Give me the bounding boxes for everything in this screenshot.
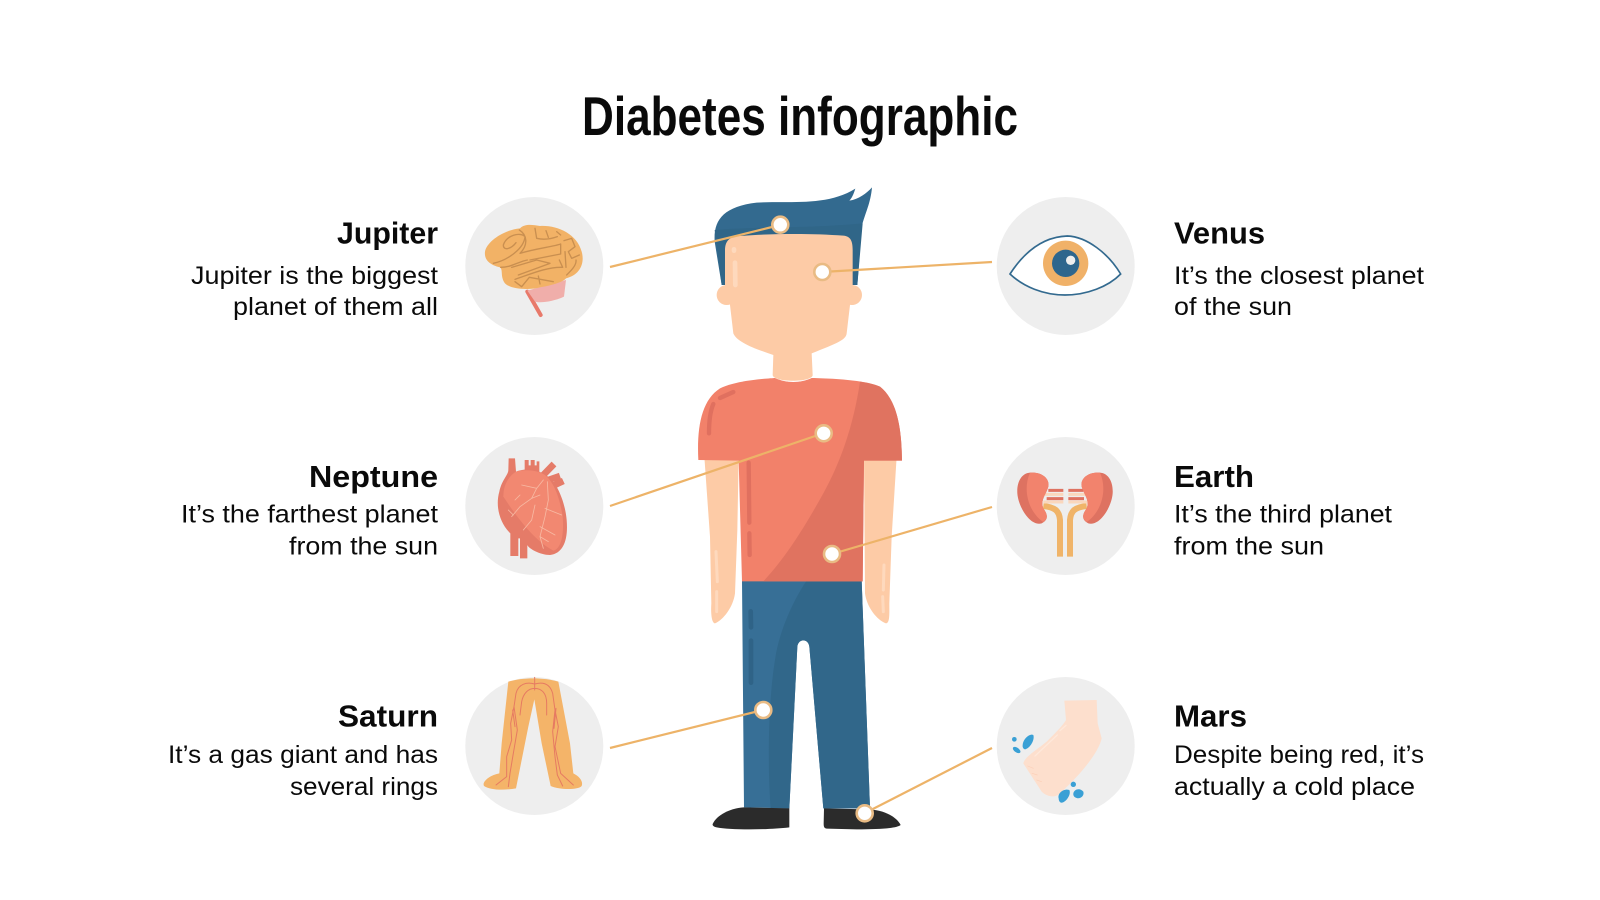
figure: t-shirt — [698, 378, 902, 581]
icon: kidneys — [1017, 473, 1113, 557]
text: Earth description: It’s the third planet — [1174, 500, 1392, 528]
text: Mars description — [1174, 741, 1424, 801]
icon: foot with drops — [1012, 700, 1102, 803]
icon: eye — [1010, 236, 1121, 295]
heading: Venus: Venus — [1174, 216, 1265, 250]
heading: Mars: Mars — [1174, 698, 1247, 734]
text: Earth description: from the sun — [1174, 532, 1324, 560]
text: Venus description: of the sun — [1174, 293, 1292, 321]
title: Diabetes infographic — [582, 85, 1018, 147]
heading: Earth: Earth — [1174, 459, 1254, 494]
panel: Jupiter (brain) — [191, 197, 603, 335]
text: Neptune description — [181, 500, 438, 560]
panel: Venus (eye) — [997, 197, 1424, 335]
heading: Neptune: Neptune — [309, 459, 438, 494]
figure: trousers and shoes — [713, 581, 901, 829]
connector lines — [610, 225, 992, 813]
text: Venus description — [1174, 262, 1424, 321]
text: Mars description: actually a cold place — [1174, 773, 1415, 801]
text: Venus description: It’s the closest planet — [1174, 262, 1424, 290]
text: Mars description: Despite being red, it’s — [1174, 741, 1424, 769]
text: Saturn description: several rings — [290, 773, 438, 801]
panel: Neptune (heart) — [181, 437, 603, 575]
heading: Saturn: Saturn — [338, 698, 438, 734]
icon: legs with veins — [484, 677, 582, 790]
figure: head and hair — [715, 187, 872, 381]
icon: heart — [498, 458, 567, 558]
panel: Saturn (legs) — [168, 677, 603, 815]
text: Earth description — [1174, 500, 1392, 560]
text: Neptune description: from the sun — [289, 532, 438, 560]
figure: arms — [704, 457, 897, 623]
heading: Jupiter: Jupiter — [337, 216, 438, 250]
marker dots — [755, 217, 873, 821]
text: Jupiter description: Jupiter is the biggest — [191, 262, 438, 290]
icon: brain — [485, 225, 583, 315]
text: Jupiter description: planet of them all — [233, 293, 438, 321]
panel: Earth (kidneys) — [997, 437, 1392, 575]
human figure — [698, 187, 902, 829]
text: Neptune description: It’s the farthest planet — [181, 500, 438, 528]
text: Saturn description — [168, 741, 438, 801]
text: Saturn description: It’s a gas giant and has — [168, 741, 438, 769]
panel: Mars (foot) — [997, 677, 1424, 815]
text: Jupiter description — [191, 262, 438, 321]
